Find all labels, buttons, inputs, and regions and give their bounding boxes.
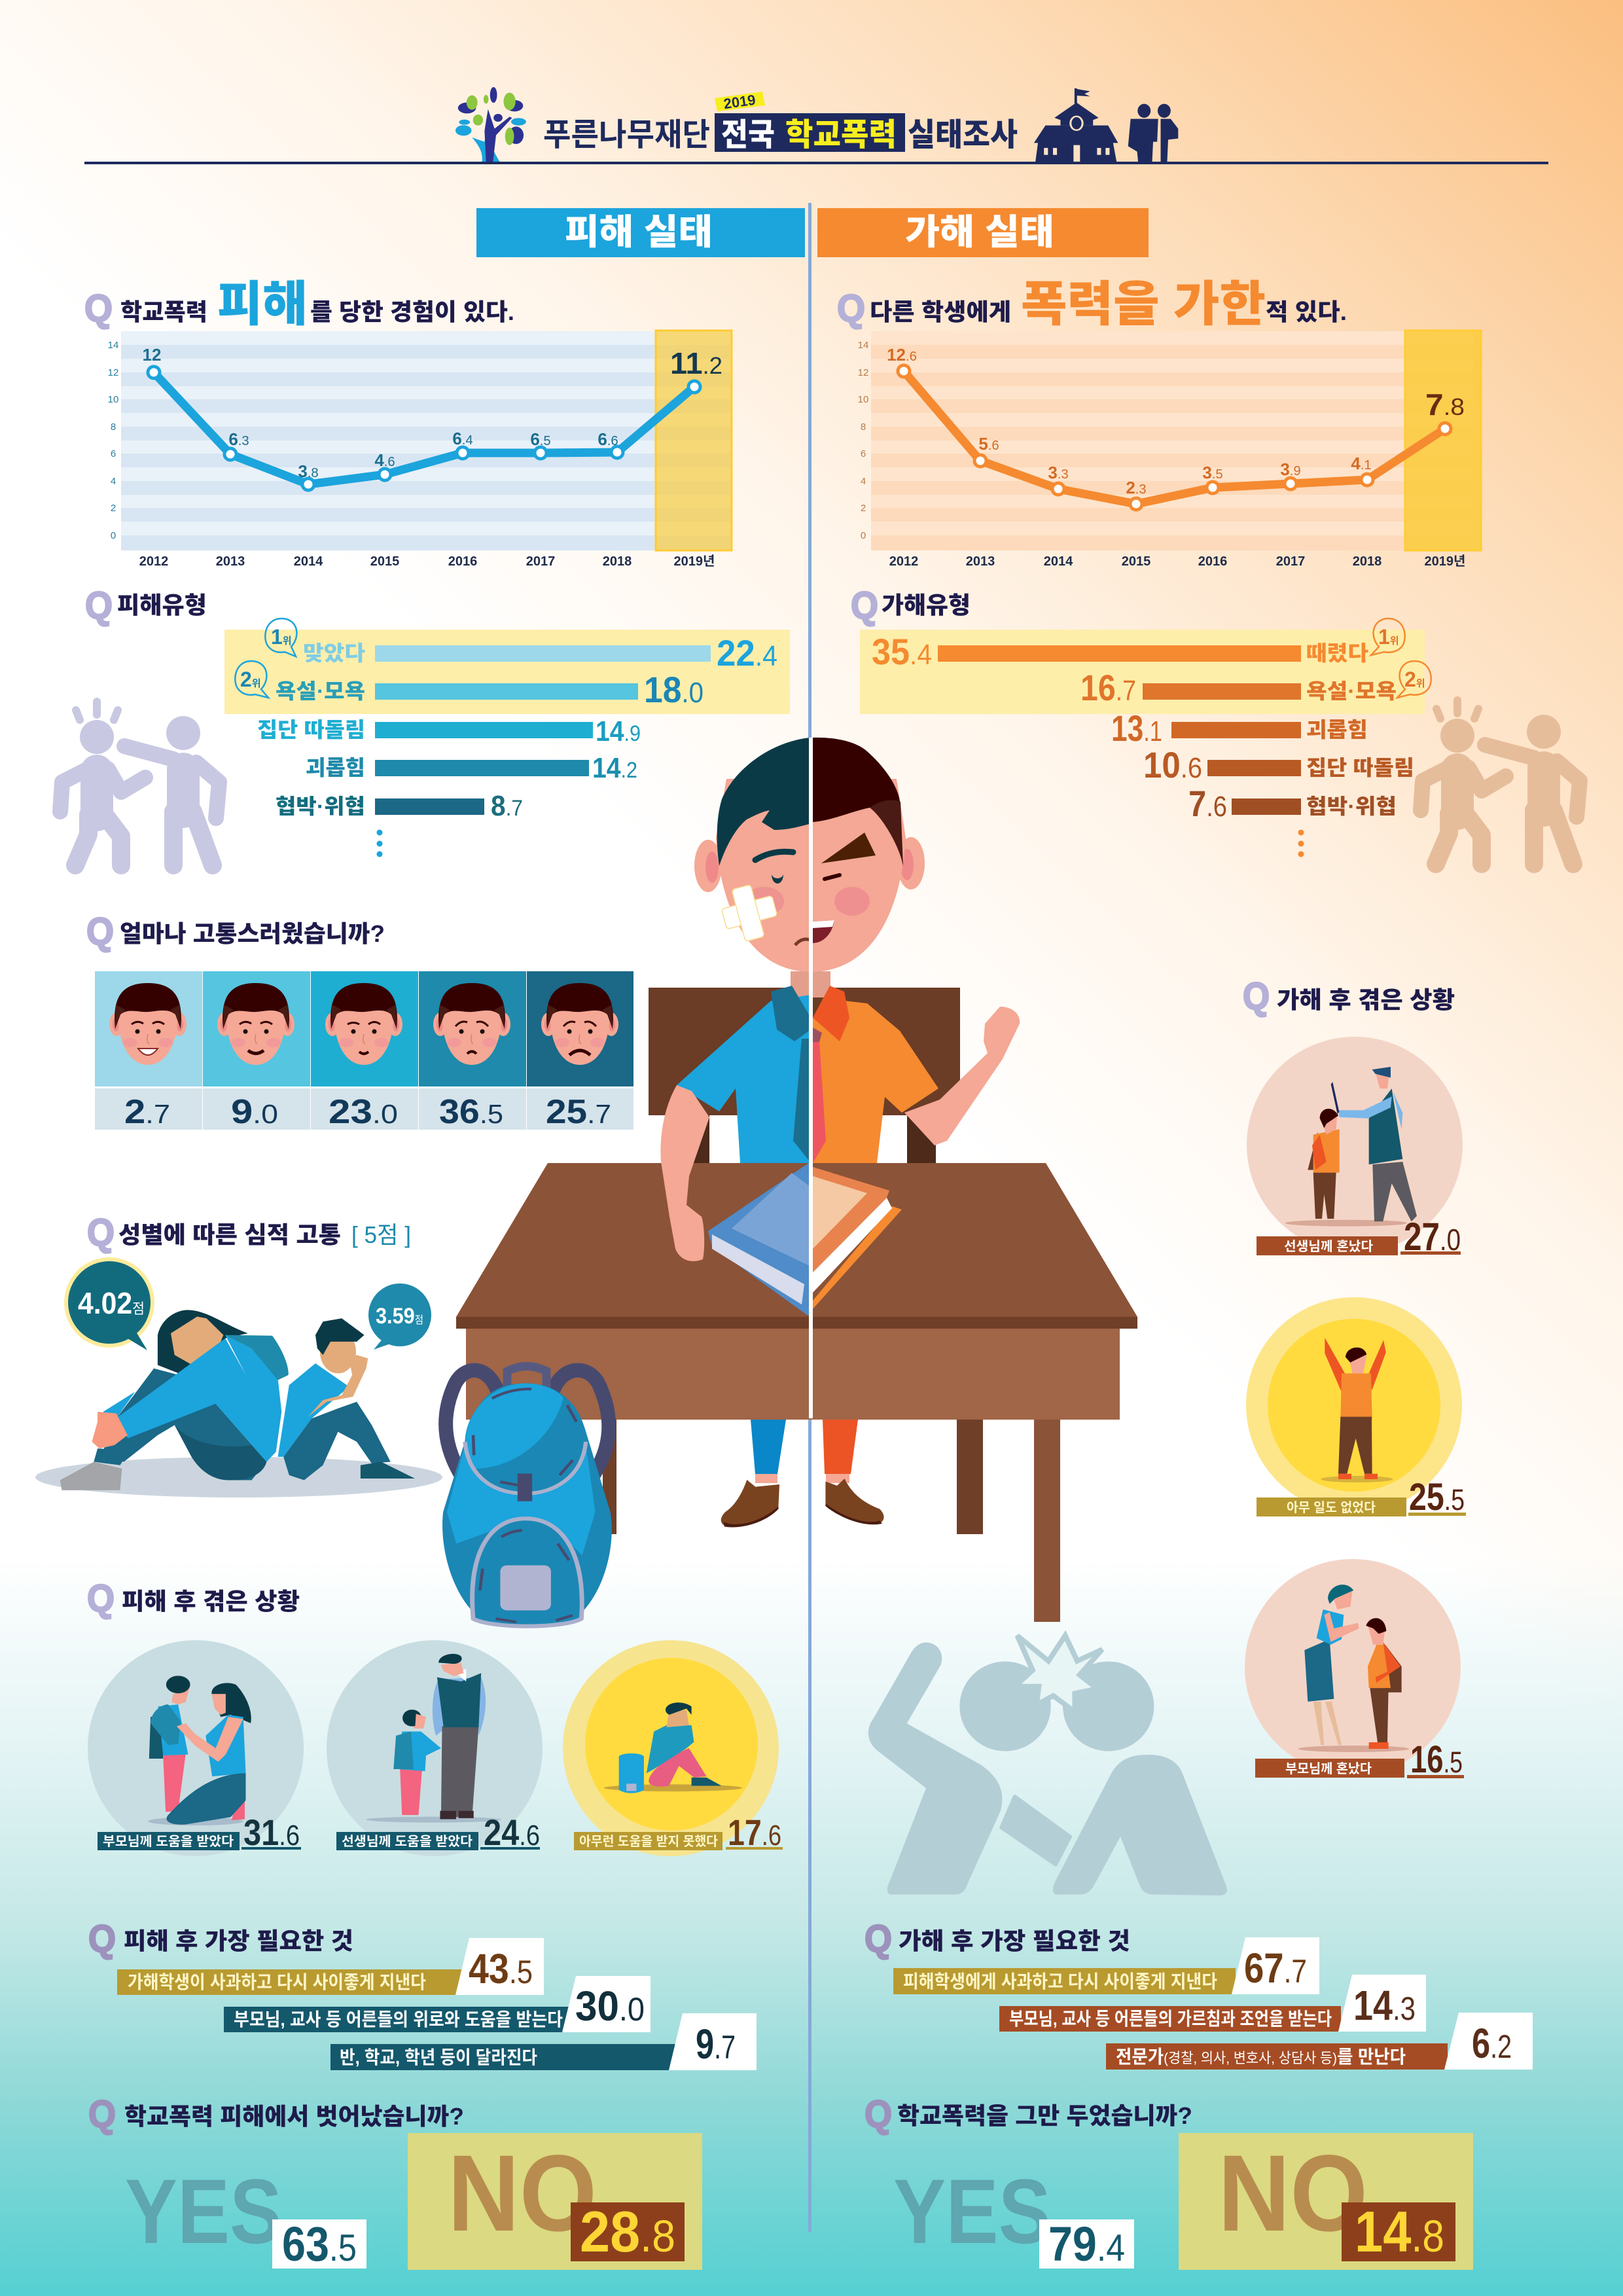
panel: no help received <box>563 1640 783 1856</box>
illustration: boy at desk <box>456 738 1137 1622</box>
row 2 <box>224 1976 651 2032</box>
value: 31.6 <box>243 1812 300 1853</box>
icon: tree logo <box>455 87 526 162</box>
panel: help from teachers: 선생님께 도움을 받았다 <box>342 1834 473 1849</box>
bar chart: perpetrator types: 7.6 <box>1188 783 1227 824</box>
line chart: victim: 6.3 <box>228 429 249 449</box>
no: 14.8 <box>1355 2199 1444 2264</box>
heading: victim needs: Q <box>88 1918 116 1960</box>
line chart: victim: 6.5 <box>530 429 551 449</box>
heading: escaped victimization <box>88 2093 464 2136</box>
heading: victim types <box>85 584 207 627</box>
bar chart: victim types: 14.9 <box>596 715 641 747</box>
row 3 <box>1106 2013 1533 2070</box>
header rule <box>84 162 1548 164</box>
faces panel: pain scale <box>95 971 633 1131</box>
bar chart: victim types: 욕설·모욕 <box>276 679 365 703</box>
bar chart: perpetrator types: 13.1 <box>1111 708 1162 749</box>
line chart: perpetrator: 2016 <box>1198 554 1227 569</box>
line chart: victim: 2014 <box>294 554 323 569</box>
title text: foundation: 푸른나무재단 <box>543 118 710 152</box>
ranked list: victim needs <box>117 1938 757 2070</box>
value: 17.6 <box>728 1812 781 1853</box>
panel: scolded by teacher: 선생님께 혼났다 <box>1284 1239 1373 1254</box>
shirt left <box>677 986 811 1163</box>
bandage <box>721 885 777 941</box>
pain level 3 <box>311 971 418 1131</box>
line chart: perpetrator: 6 <box>861 448 866 459</box>
heading: victim experience <box>84 277 514 331</box>
chair <box>649 988 960 1163</box>
row 3: 전문가(경찰, 의사, 변호사, 상담사 등)를 만난다 <box>1116 2047 1406 2067</box>
heading: how painful: 얼마나 고통스러웠습니까? <box>120 920 385 947</box>
year tag: 2019 <box>722 92 757 112</box>
icon: collision <box>868 1636 1227 1895</box>
line chart: perpetrator: 14 <box>858 340 868 351</box>
title box <box>715 113 905 152</box>
bar chart: victim types: 협박·위협 <box>276 795 365 818</box>
bar chart: victim types <box>224 619 790 857</box>
row 2: 30.0 <box>575 1982 645 2030</box>
line chart: perpetrator: 2 <box>861 503 866 514</box>
section header: perpetrator <box>817 208 1149 257</box>
line chart: perpetrator: 3.3 <box>1048 463 1069 482</box>
line chart: perpetrator: 3.5 <box>1202 463 1223 482</box>
bar chart: perpetrator types: 욕설·모욕 <box>1306 679 1397 703</box>
line chart: victim: 2018 <box>603 554 632 569</box>
pain level 3: 23.0 <box>329 1093 398 1131</box>
bar chart: victim types: 8.7 <box>491 790 523 822</box>
line chart: perpetrator: 4.1 <box>1351 454 1372 473</box>
head <box>694 738 925 972</box>
pain level 2: 9.0 <box>231 1093 278 1131</box>
heading: victim experience: 를 당한 경험이 있다. <box>310 298 514 325</box>
line chart: victim: 2017 <box>526 554 555 569</box>
icon: students <box>1128 104 1178 162</box>
no: NO <box>1218 2133 1368 2254</box>
line chart: victim: 4.6 <box>374 450 395 470</box>
no: 28.8 <box>580 2199 675 2264</box>
icon: backpack <box>442 1367 612 1626</box>
pain level 1: 2.7 <box>124 1093 170 1131</box>
girl <box>60 1310 289 1490</box>
label <box>574 1832 722 1850</box>
heading: after victimization <box>87 1577 300 1620</box>
ranked list: perpetrator needs <box>893 1937 1533 2070</box>
line chart: perpetrator: 7.8 <box>1425 387 1465 422</box>
line chart: victim: 2012 <box>139 554 168 569</box>
panel: scolded by teacher <box>1247 1037 1463 1259</box>
line chart: victim: 2016 <box>448 554 477 569</box>
panel: no help received: 아무런 도움을 받지 못했다 <box>579 1834 718 1849</box>
icon: fighters left <box>60 702 219 865</box>
line chart: victim: 10 <box>108 394 118 405</box>
illustration: sad teens <box>35 1259 442 1498</box>
bar chart: perpetrator types: 16.7 <box>1080 667 1136 708</box>
line chart: perpetrator: 4 <box>861 476 866 487</box>
heading: after perpetration: 가해 후 겪은 상황 <box>1277 986 1455 1013</box>
pain level 2 <box>203 971 310 1131</box>
value: 25.5 <box>1409 1476 1465 1518</box>
line chart: perpetrator: 2012 <box>889 554 918 569</box>
heading: victim experience: 학교폭력 <box>120 298 207 325</box>
line chart: victim: 0 <box>111 530 116 541</box>
row 1 <box>117 1938 544 1995</box>
line chart: perpetrator: 2019년 <box>1425 554 1465 569</box>
callout: female 4.02 <box>66 1259 152 1350</box>
line chart: victim: 12 <box>143 345 161 365</box>
panel: victim yes/no <box>125 2133 702 2271</box>
line chart: victim: 11.2 <box>670 346 722 380</box>
line chart: victim: 2019년 <box>674 554 715 569</box>
heading: perpetrator experience <box>837 277 1347 331</box>
row 3: 9.7 <box>696 2020 736 2068</box>
heading: perpetrator experience: 다른 학생에게 <box>870 298 1011 325</box>
line chart: victim: 8 <box>111 422 116 433</box>
heading: perpetrator needs: 가해 후 가장 필요한 것 <box>899 1928 1130 1954</box>
heading: gender distress: 성별에 따른 심적 고통 <box>118 1221 341 1248</box>
heading: escaped victimization: Q <box>88 2093 116 2136</box>
line chart: victim: 6 <box>111 448 116 459</box>
callout: male 3.59 <box>368 1283 431 1350</box>
neck <box>791 971 830 997</box>
line chart: victim: 6.6 <box>597 429 618 449</box>
no <box>1179 2133 1473 2270</box>
line chart: victim: 2013 <box>216 554 245 569</box>
bar chart: perpetrator types: 2위 <box>1404 668 1425 691</box>
row 1: 피해학생에게 사과하고 다시 사이좋게 지낸다 <box>903 1971 1217 1992</box>
heading: victim needs: 피해 후 가장 필요한 것 <box>124 1928 353 1954</box>
heading: perpetrator experience: 폭력을 가한 <box>1021 277 1266 331</box>
line chart: perpetrator: 2018 <box>1353 554 1382 569</box>
heading: gender distress <box>87 1211 411 1254</box>
section header: victim: 피해 실태 <box>565 213 713 252</box>
pain level 5 <box>527 971 633 1131</box>
heading: victim needs <box>88 1918 353 1960</box>
shirt right <box>813 986 938 1163</box>
line chart: perpetrator: 12.6 <box>887 345 917 365</box>
bar chart: perpetrator types: 협박·위협 <box>1306 795 1397 818</box>
year tag <box>715 92 765 112</box>
row 1: 67.7 <box>1244 1945 1307 1992</box>
no <box>408 2133 702 2270</box>
bar chart: victim types: 1위 <box>271 625 292 649</box>
label <box>1257 1236 1398 1255</box>
bar chart: victim types: 22.4 <box>717 632 777 673</box>
heading: gender distress: [ 5점 ] <box>351 1221 411 1248</box>
heading: perpetrator types: Q <box>851 584 878 627</box>
heading: after victimization: 피해 후 겪은 상황 <box>122 1588 300 1615</box>
heading: victim experience: Q <box>84 287 113 330</box>
panel: help from parents: 부모님께 도움을 받았다 <box>103 1834 234 1849</box>
callout: female 4.02: 4.02점 <box>78 1286 145 1320</box>
value: 16.5 <box>1410 1738 1463 1781</box>
row 1: 가해학생이 사과하고 다시 사이좋게 지낸다 <box>128 1972 426 1992</box>
heading: victim experience: 피해 <box>217 277 308 331</box>
pain level 4: 36.5 <box>439 1093 503 1131</box>
no: NO <box>448 2133 597 2254</box>
title box: 학교폭력 <box>785 118 897 152</box>
line chart: perpetrator: 2.3 <box>1126 478 1147 497</box>
heading: how painful: Q <box>86 910 114 953</box>
bar chart: perpetrator types: 때렸다 <box>1306 641 1368 665</box>
arms <box>660 1007 1020 1261</box>
panel: nothing happened <box>1246 1297 1466 1518</box>
heading: victim types: 피해유형 <box>117 592 207 619</box>
heading: perpetrator types: 가해유형 <box>882 592 971 619</box>
heading: after perpetration <box>1243 975 1455 1018</box>
heading: perpetrator experience: 적 있다. <box>1266 298 1347 325</box>
bar chart: perpetrator types <box>860 619 1431 857</box>
line chart: perpetrator <box>858 331 1481 569</box>
row 2 <box>999 1975 1426 2032</box>
bar chart: victim types: 2위 <box>240 668 261 691</box>
bar chart: perpetrator types: 1위 <box>1378 625 1399 649</box>
pain level 5: 25.7 <box>546 1093 611 1131</box>
book <box>708 1162 902 1315</box>
line chart: perpetrator: 2015 <box>1122 554 1150 569</box>
bar chart: victim types: 14.2 <box>592 752 637 784</box>
line chart: victim: 6.4 <box>452 429 473 448</box>
line chart: perpetrator: 5.6 <box>978 434 999 454</box>
heading: escaped victimization: 학교폭력 피해에서 벗어났습니까? <box>124 2103 464 2130</box>
line chart: victim: 4 <box>111 476 116 487</box>
row 3: 반, 학교, 학년 등이 달라진다 <box>340 2047 537 2068</box>
line chart: perpetrator: 8 <box>861 422 866 433</box>
row 1: 43.5 <box>469 1945 533 1992</box>
row 1 <box>893 1937 1319 1994</box>
panel: scolded by parents <box>1245 1559 1464 1781</box>
bar chart: victim types: 맞았다 <box>303 641 365 665</box>
heading: victim types: Q <box>85 584 113 627</box>
line chart: victim: 3.8 <box>298 461 319 481</box>
panel: nothing happened: 아무 일도 없었다 <box>1287 1500 1376 1515</box>
heading: stopped violence: 학교폭력을 그만 두었습니까? <box>897 2102 1192 2129</box>
line chart: victim: 2 <box>111 503 116 514</box>
heading: stopped violence: Q <box>865 2093 892 2136</box>
heading: perpetrator needs <box>865 1918 1130 1960</box>
section header: perpetrator: 가해 실태 <box>905 213 1054 252</box>
icon: school <box>1034 88 1118 162</box>
bar chart: perpetrator types: 집단 따돌림 <box>1306 756 1414 780</box>
pain level 4 <box>419 971 526 1131</box>
line chart: victim: 14 <box>108 340 118 351</box>
center highlight line <box>809 738 813 1418</box>
row 3 <box>330 2013 757 2070</box>
panel: help from parents <box>88 1640 304 1856</box>
boy legs and shoes <box>721 1420 884 1527</box>
heading: how painful <box>86 910 385 953</box>
value: 24.6 <box>484 1812 540 1853</box>
pain level 1 <box>95 971 202 1131</box>
label <box>98 1832 240 1850</box>
line chart: perpetrator: 2013 <box>966 554 995 569</box>
yes: 63.5 <box>282 2217 357 2271</box>
heading: perpetrator needs: Q <box>865 1918 892 1960</box>
heading: stopped violence <box>865 2093 1192 2136</box>
bar chart: victim types: 집단 따돌림 <box>257 718 365 742</box>
label <box>1255 1759 1404 1778</box>
bar chart: perpetrator types: 10.6 <box>1143 744 1202 785</box>
heading: perpetrator experience: Q <box>837 287 865 330</box>
panel: scolded by parents: 부모님께 혼났다 <box>1285 1761 1372 1776</box>
row 2: 부모님, 교사 등 어른들의 위로와 도움을 받는다 <box>234 2009 563 2030</box>
yes: YES <box>893 2160 1051 2263</box>
line chart: perpetrator: 3.9 <box>1280 459 1301 479</box>
section header: victim <box>476 208 805 257</box>
line chart: perpetrator: 2014 <box>1044 554 1073 569</box>
yes: YES <box>125 2160 282 2263</box>
bar chart: victim types: 괴롭힘 <box>306 756 365 780</box>
yes: 79.4 <box>1048 2217 1125 2271</box>
bar chart: perpetrator types: 35.4 <box>872 631 932 672</box>
line chart: perpetrator: 2017 <box>1276 554 1305 569</box>
line chart: perpetrator: 0 <box>861 530 866 541</box>
boy <box>278 1318 415 1480</box>
row 3: 6.2 <box>1472 2020 1512 2067</box>
label <box>1257 1498 1406 1516</box>
icon: fighters right <box>1421 700 1580 864</box>
heading: gender distress: Q <box>87 1211 115 1254</box>
heading: after perpetration: Q <box>1243 975 1270 1018</box>
title box: 전국 <box>721 118 775 152</box>
line chart: perpetrator: 10 <box>858 394 868 405</box>
line chart: perpetrator: 12 <box>858 367 868 378</box>
line chart: victim: 12 <box>108 367 118 378</box>
title text: survey: 실태조사 <box>908 118 1018 152</box>
row 2: 14.3 <box>1353 1982 1416 2029</box>
line chart: victim: 2015 <box>370 554 399 569</box>
header <box>84 87 1548 164</box>
heading: perpetrator types <box>851 584 971 627</box>
bar chart: victim types: 18.0 <box>644 669 704 710</box>
panel: perpetrator yes/no <box>893 2133 1473 2271</box>
desk <box>456 1163 1137 1622</box>
row 2: 부모님, 교사 등 어른들의 가르침과 조언을 받는다 <box>1009 2009 1332 2029</box>
heading: after victimization: Q <box>87 1577 115 1620</box>
value: 27.0 <box>1404 1215 1461 1259</box>
line chart: victim <box>108 331 732 569</box>
label <box>336 1832 478 1850</box>
bar chart: perpetrator types: 괴롭힘 <box>1306 718 1368 742</box>
callout: male 3.59: 3.59점 <box>376 1304 423 1329</box>
center divider line <box>808 203 812 2232</box>
panel: help from teachers <box>327 1640 543 1856</box>
